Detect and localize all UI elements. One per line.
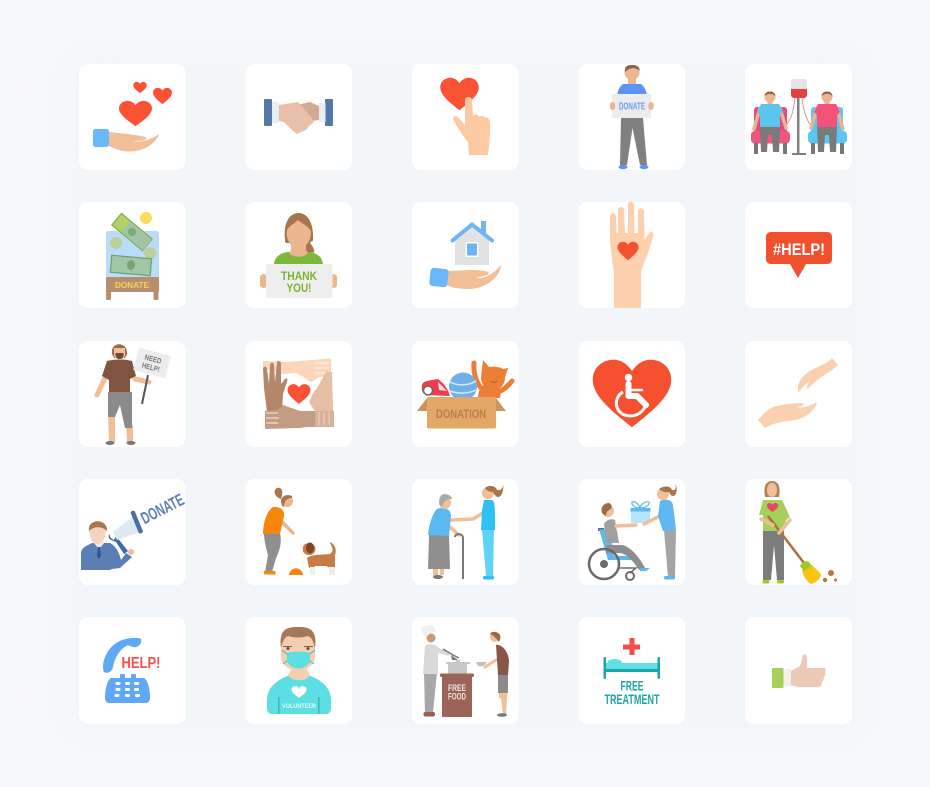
panel: caring hand with hearts [79, 64, 186, 170]
panel: handshake [246, 64, 352, 170]
panel: finger touching heart [412, 64, 518, 170]
icon: red cross [623, 638, 640, 655]
panel: two reaching hands [745, 341, 852, 447]
icon: toy cat [474, 360, 512, 398]
panel: thumbs up [745, 617, 852, 724]
panel: volunteer sweeping [745, 479, 852, 585]
icon: three hearts [119, 82, 172, 126]
label: free treatment: TREATMENT [604, 691, 660, 707]
sign text: NEED [144, 353, 163, 366]
icon: gift box [630, 502, 650, 523]
panel: help phone [79, 617, 186, 724]
icon: dust [823, 570, 837, 582]
panel: free food kitchen [412, 617, 518, 724]
icon: large heart [593, 360, 671, 427]
icon: cooking pot [446, 660, 470, 674]
panel: blood donation [745, 64, 852, 170]
icon: left donor in pink chair [751, 92, 790, 154]
icon: woman giving gift [644, 484, 677, 580]
icon: hospital bed [604, 657, 660, 679]
icon: volunteer woman [759, 481, 790, 584]
icon: food bowl [289, 568, 303, 575]
icon: wheelchair symbol [616, 374, 646, 416]
icon: heart [440, 78, 479, 110]
icon: toy ball [449, 372, 477, 400]
panel: donation box with money [79, 202, 186, 308]
megaphone text: DONATE [138, 490, 187, 528]
icon: upper hand [798, 358, 838, 393]
icon: woman feeding [263, 488, 293, 574]
icon: woman with sign: YOU! [286, 281, 312, 295]
panel: woman feeding dog [246, 479, 352, 585]
panel: free treatment [578, 617, 685, 724]
panel: helping elderly woman [412, 479, 518, 585]
panel: gift for wheelchair user [578, 479, 685, 585]
icon: megaphone [109, 510, 143, 554]
icon: pointing hand [453, 97, 490, 155]
panel: masked volunteer [246, 617, 352, 724]
panel: man holding donate sign [578, 64, 685, 170]
icon: homeless man: HELP! [141, 361, 161, 374]
panel: four hands around heart [246, 341, 352, 447]
icon: palm heart [618, 242, 638, 260]
icon: house [452, 221, 492, 265]
icon: food counter: FOOD [448, 692, 466, 702]
box label: DONATION [436, 407, 486, 421]
sign text: DONATE [619, 102, 645, 112]
icon: homeless man [97, 344, 171, 445]
icon: man in wheelchair [589, 503, 650, 580]
icon: man in suit [81, 521, 134, 570]
icon: chef [422, 625, 459, 716]
icon: blood bag and pole [784, 79, 812, 155]
icon: raised hand [610, 201, 654, 308]
panel: hand holding house [412, 202, 518, 308]
counter text: FREE [448, 683, 466, 693]
panel: donation box of toys [412, 341, 518, 447]
icon: open hand [429, 265, 501, 289]
shirt text: VOLUNTEER [282, 703, 316, 710]
panel: woman holding thank you sign [246, 202, 352, 308]
label: help: HELP! [122, 655, 160, 672]
icon: toy car [422, 379, 450, 396]
box label: DONATE [115, 280, 149, 290]
icon: man receiving food [476, 632, 509, 717]
panel: accessibility heart [578, 341, 685, 447]
panel: man with megaphone [79, 479, 187, 585]
icon: broom [761, 516, 821, 584]
icon: woman with sign [260, 213, 337, 298]
icon: young volunteer [473, 484, 503, 580]
icon: telephone handset [103, 638, 141, 673]
bubble text: #HELP! [773, 240, 825, 259]
panel: man with need help sign [79, 341, 186, 447]
icon: handshake [264, 99, 333, 134]
label: free treatment: FREE [620, 678, 644, 694]
icon: thumbs up [772, 654, 826, 688]
icon: speech bubble [766, 232, 832, 278]
icon: right donor in blue chair [808, 92, 847, 154]
sign text: THANK [281, 269, 317, 283]
icon: open hand [93, 129, 159, 152]
icon: dog [300, 542, 336, 575]
panel: help speech bubble [745, 202, 852, 308]
panel: raised hand with heart [578, 201, 685, 308]
icon: telephone base [105, 674, 150, 703]
icon: lower hand [758, 402, 817, 428]
icon: food counter [440, 674, 474, 717]
icon: four hands [263, 358, 334, 429]
label: free treatment [604, 678, 660, 707]
icon: elderly woman with cane [428, 494, 473, 579]
